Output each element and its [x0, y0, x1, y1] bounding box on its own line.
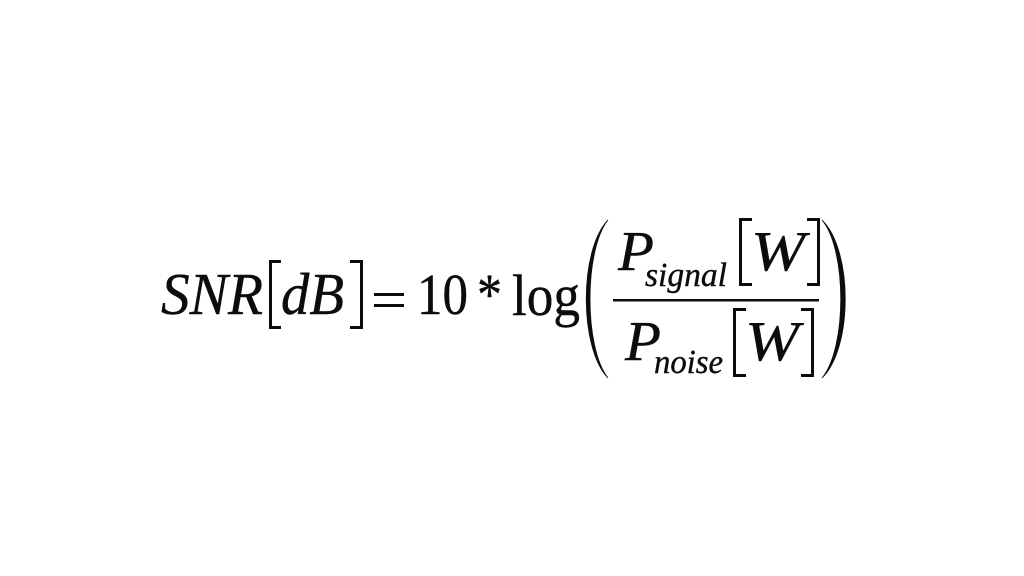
denominator: P noise [W]: noise: [654, 344, 723, 381]
right parenthesis: [822, 220, 845, 378]
left side: SNR[dB]: dB: [281, 261, 344, 327]
constant: 10 *: 10: [417, 262, 468, 327]
denominator: P noise [W]: W: [745, 311, 804, 373]
numerator: P signal [W]: [617, 220, 818, 294]
denominator: P noise [W]: P: [624, 311, 661, 373]
numerator: P signal [W]: W: [751, 221, 810, 283]
denominator: P noise [W]: [624, 310, 812, 381]
numerator: P signal [W]: P: [617, 221, 654, 283]
constant: 10 *: *: [477, 262, 502, 327]
log function: log: [512, 263, 580, 328]
constant: 10 *: [417, 262, 502, 327]
left side: SNR[dB]: SNR: [161, 261, 263, 327]
numerator: P signal [W]: signal: [645, 257, 727, 294]
fraction bar: [613, 299, 819, 302]
left parenthesis: [586, 220, 608, 378]
left side: SNR[dB]: [161, 261, 362, 328]
equals sign: [374, 293, 404, 307]
